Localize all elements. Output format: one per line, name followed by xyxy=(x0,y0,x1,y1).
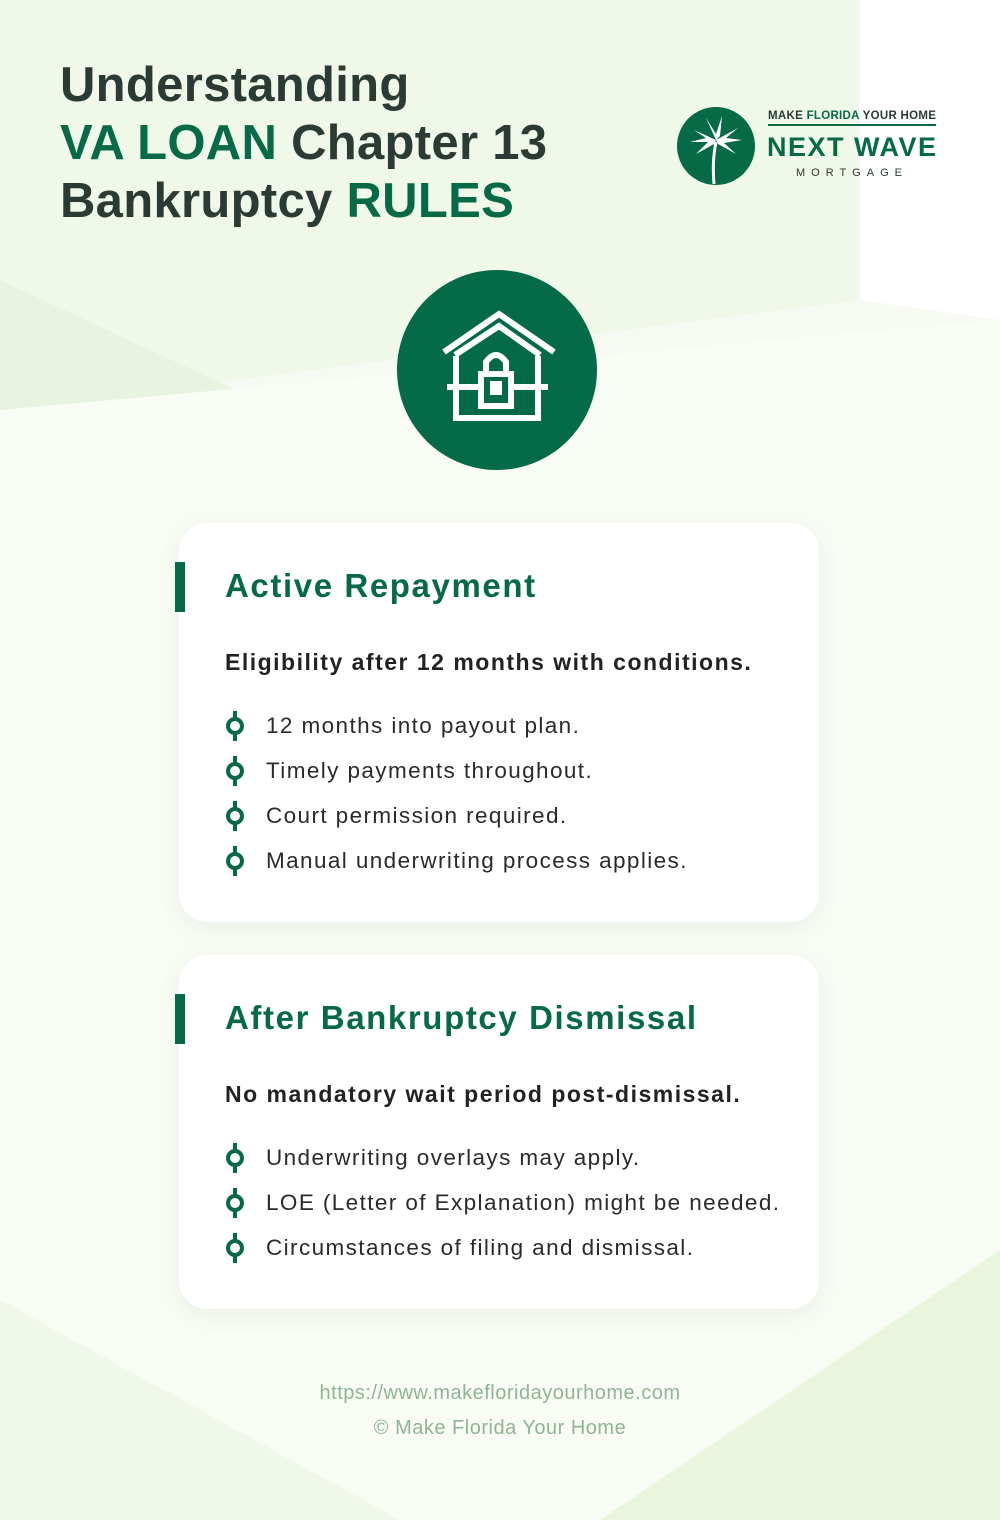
logo: NEXT WAVE xyxy=(767,132,938,162)
icon: palm circle xyxy=(677,107,755,185)
logo xyxy=(677,107,938,185)
panel: active repayment xyxy=(179,523,819,922)
title: VA LOAN Chapter 13 xyxy=(60,116,547,170)
panel: after dismissal xyxy=(179,955,819,1309)
icon: house lock xyxy=(397,270,597,470)
logo text: MAKE FLORIDA YOUR HOME xyxy=(768,110,936,122)
text: No mandatory wait period post-dismissal. xyxy=(225,1081,741,1107)
footer: https://www.makefloridayourhome.com xyxy=(320,1382,680,1404)
heading: Active Repayment xyxy=(225,567,537,604)
list: LOE (Letter of Explanation) might be needed. xyxy=(266,1190,780,1214)
list: Court permission required. xyxy=(266,802,568,828)
heading: After Bankruptcy Dismissal xyxy=(225,999,698,1036)
list xyxy=(226,1143,780,1263)
list xyxy=(226,711,688,876)
logo: MORTGAGE xyxy=(796,167,908,179)
footer: © Make Florida Your Home xyxy=(374,1417,626,1439)
list: Timely payments throughout. xyxy=(266,758,593,782)
list: Underwriting overlays may apply. xyxy=(266,1144,641,1170)
title: Bankruptcy RULES xyxy=(60,174,514,228)
title xyxy=(60,58,547,228)
list: 12 months into payout plan. xyxy=(266,712,580,738)
list: Circumstances of filing and dismissal. xyxy=(266,1234,694,1260)
footer xyxy=(320,1382,680,1439)
text: Eligibility after 12 months with conditions. xyxy=(225,649,752,675)
title: Understanding xyxy=(60,58,410,112)
list: Manual underwriting process applies. xyxy=(266,848,688,872)
